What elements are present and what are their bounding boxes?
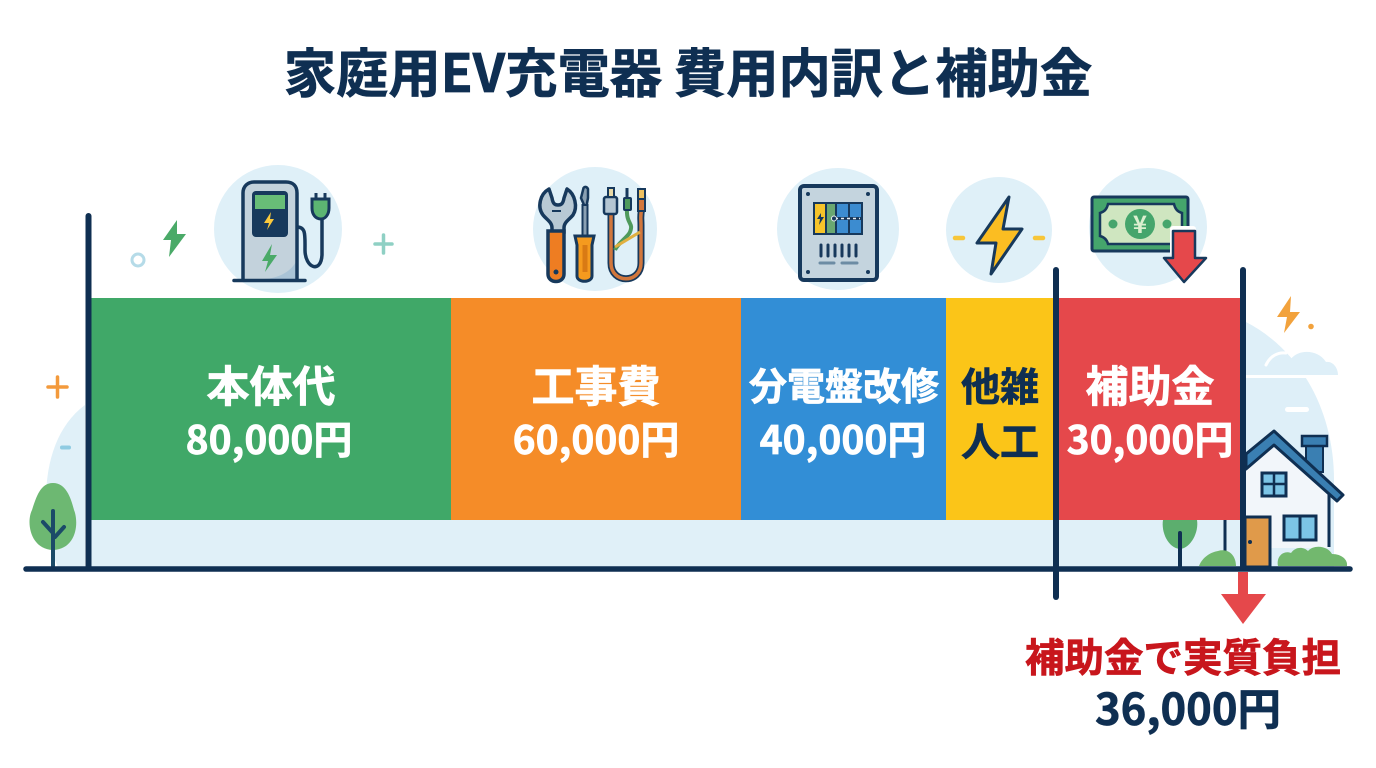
decoration: orange bolt and dot	[1277, 296, 1314, 333]
icon: EV charger	[214, 165, 342, 293]
background: left hill	[46, 405, 85, 567]
subsidy start marker	[1053, 270, 1059, 597]
icon: small tree and bush right	[1163, 520, 1236, 566]
bar segment: 補助金: 30,000円	[1067, 410, 1233, 466]
bar segment: 他雑人工: 人工	[961, 412, 1039, 468]
bar segment: 本体代: 本体代	[206, 353, 336, 415]
bar segment: 他雑人工: 他雑	[961, 357, 1039, 413]
background: right hill and cloud	[1246, 322, 1341, 567]
callout label: net cost: 補助金で実質負担	[1025, 627, 1341, 684]
decoration: plus	[375, 235, 392, 253]
icon: tree left	[30, 483, 76, 566]
background: pale band under bars	[91, 519, 1241, 567]
decoration: ring	[132, 254, 144, 266]
icon: banknote with down arrow	[1089, 168, 1207, 286]
bar segment: 工事費: 60,000円	[513, 410, 679, 466]
bar segment: 補助金	[1056, 298, 1242, 520]
bar segment: 工事費	[451, 298, 741, 520]
subsidy end marker	[1240, 270, 1246, 567]
bar segment: 分電盤改修: 40,000円	[760, 410, 926, 466]
decoration: left plus and minus	[48, 377, 69, 448]
bar segment: 工事費: 工事費	[532, 353, 660, 415]
icon: banknote with down arrow: ¥	[1133, 205, 1147, 240]
icon: house	[1245, 431, 1347, 567]
bar segment: 分電盤改修	[741, 298, 946, 520]
bar segment: 分電盤改修: 分電盤改修	[749, 356, 939, 411]
icon: lightning bolt	[946, 177, 1052, 283]
arrow: down to net cost	[1221, 572, 1266, 624]
bar segment: 補助金: 補助金	[1086, 353, 1214, 415]
bar segment: 本体代: 80,000円	[186, 410, 352, 466]
callout value: net cost: 36,000円	[1095, 675, 1281, 738]
bar segment: 本体代	[91, 298, 451, 520]
ground baseline	[26, 566, 1350, 572]
title: 家庭用EV充電器 費用内訳と補助金	[284, 32, 1092, 108]
left vertical marker	[86, 216, 92, 567]
bar segment: 他雑人工	[946, 298, 1056, 520]
icon: tools and cables	[533, 167, 657, 291]
icon: distribution board	[777, 168, 899, 290]
decoration: green bolt	[163, 220, 186, 257]
